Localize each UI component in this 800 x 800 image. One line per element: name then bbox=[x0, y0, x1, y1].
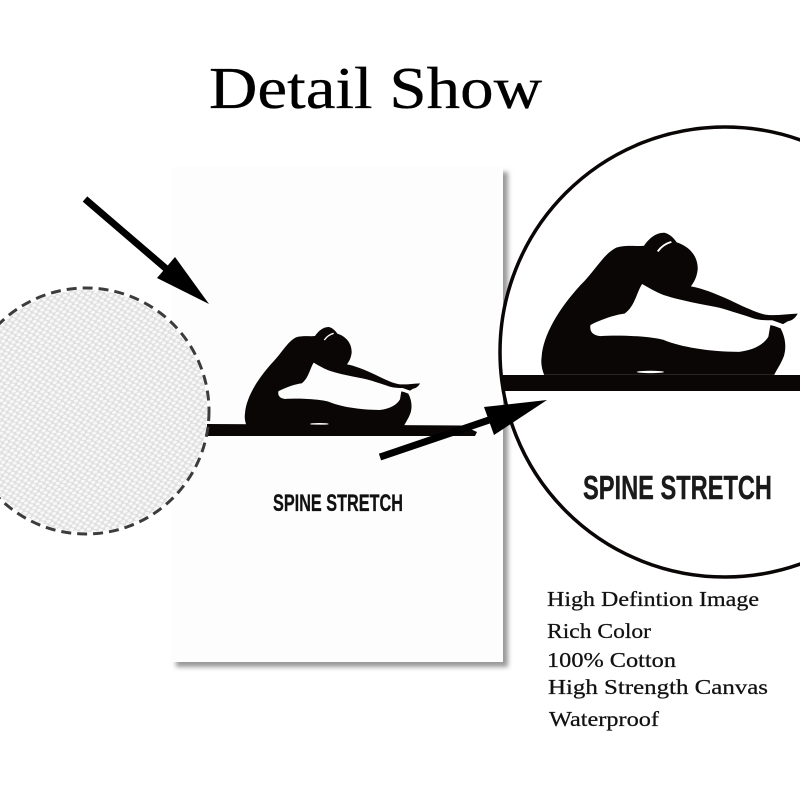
feature list: Rich Color bbox=[547, 619, 651, 643]
zoomed figure bbox=[541, 233, 798, 375]
feature list: High Strength Canvas bbox=[548, 675, 768, 699]
title: Detail Show bbox=[209, 55, 542, 121]
panel: zoomed detail circle bbox=[495, 127, 800, 577]
poster caption: SPINE STRETCH bbox=[273, 490, 403, 517]
panel: canvas texture magnifier bbox=[0, 288, 209, 534]
figure: seated spine stretch silhouette bbox=[245, 327, 420, 426]
arrow: to canvas texture bbox=[85, 199, 209, 304]
feature list: Waterproof bbox=[549, 707, 659, 731]
arrow: to zoomed detail bbox=[380, 400, 547, 457]
panel: poster bbox=[171, 167, 508, 667]
zoomed mat bbox=[495, 375, 800, 391]
exercise mat bbox=[207, 424, 477, 436]
feature list bbox=[547, 587, 768, 731]
feature list: 100% Cotton bbox=[547, 648, 677, 672]
feature list: High Defintion Image bbox=[547, 587, 759, 611]
